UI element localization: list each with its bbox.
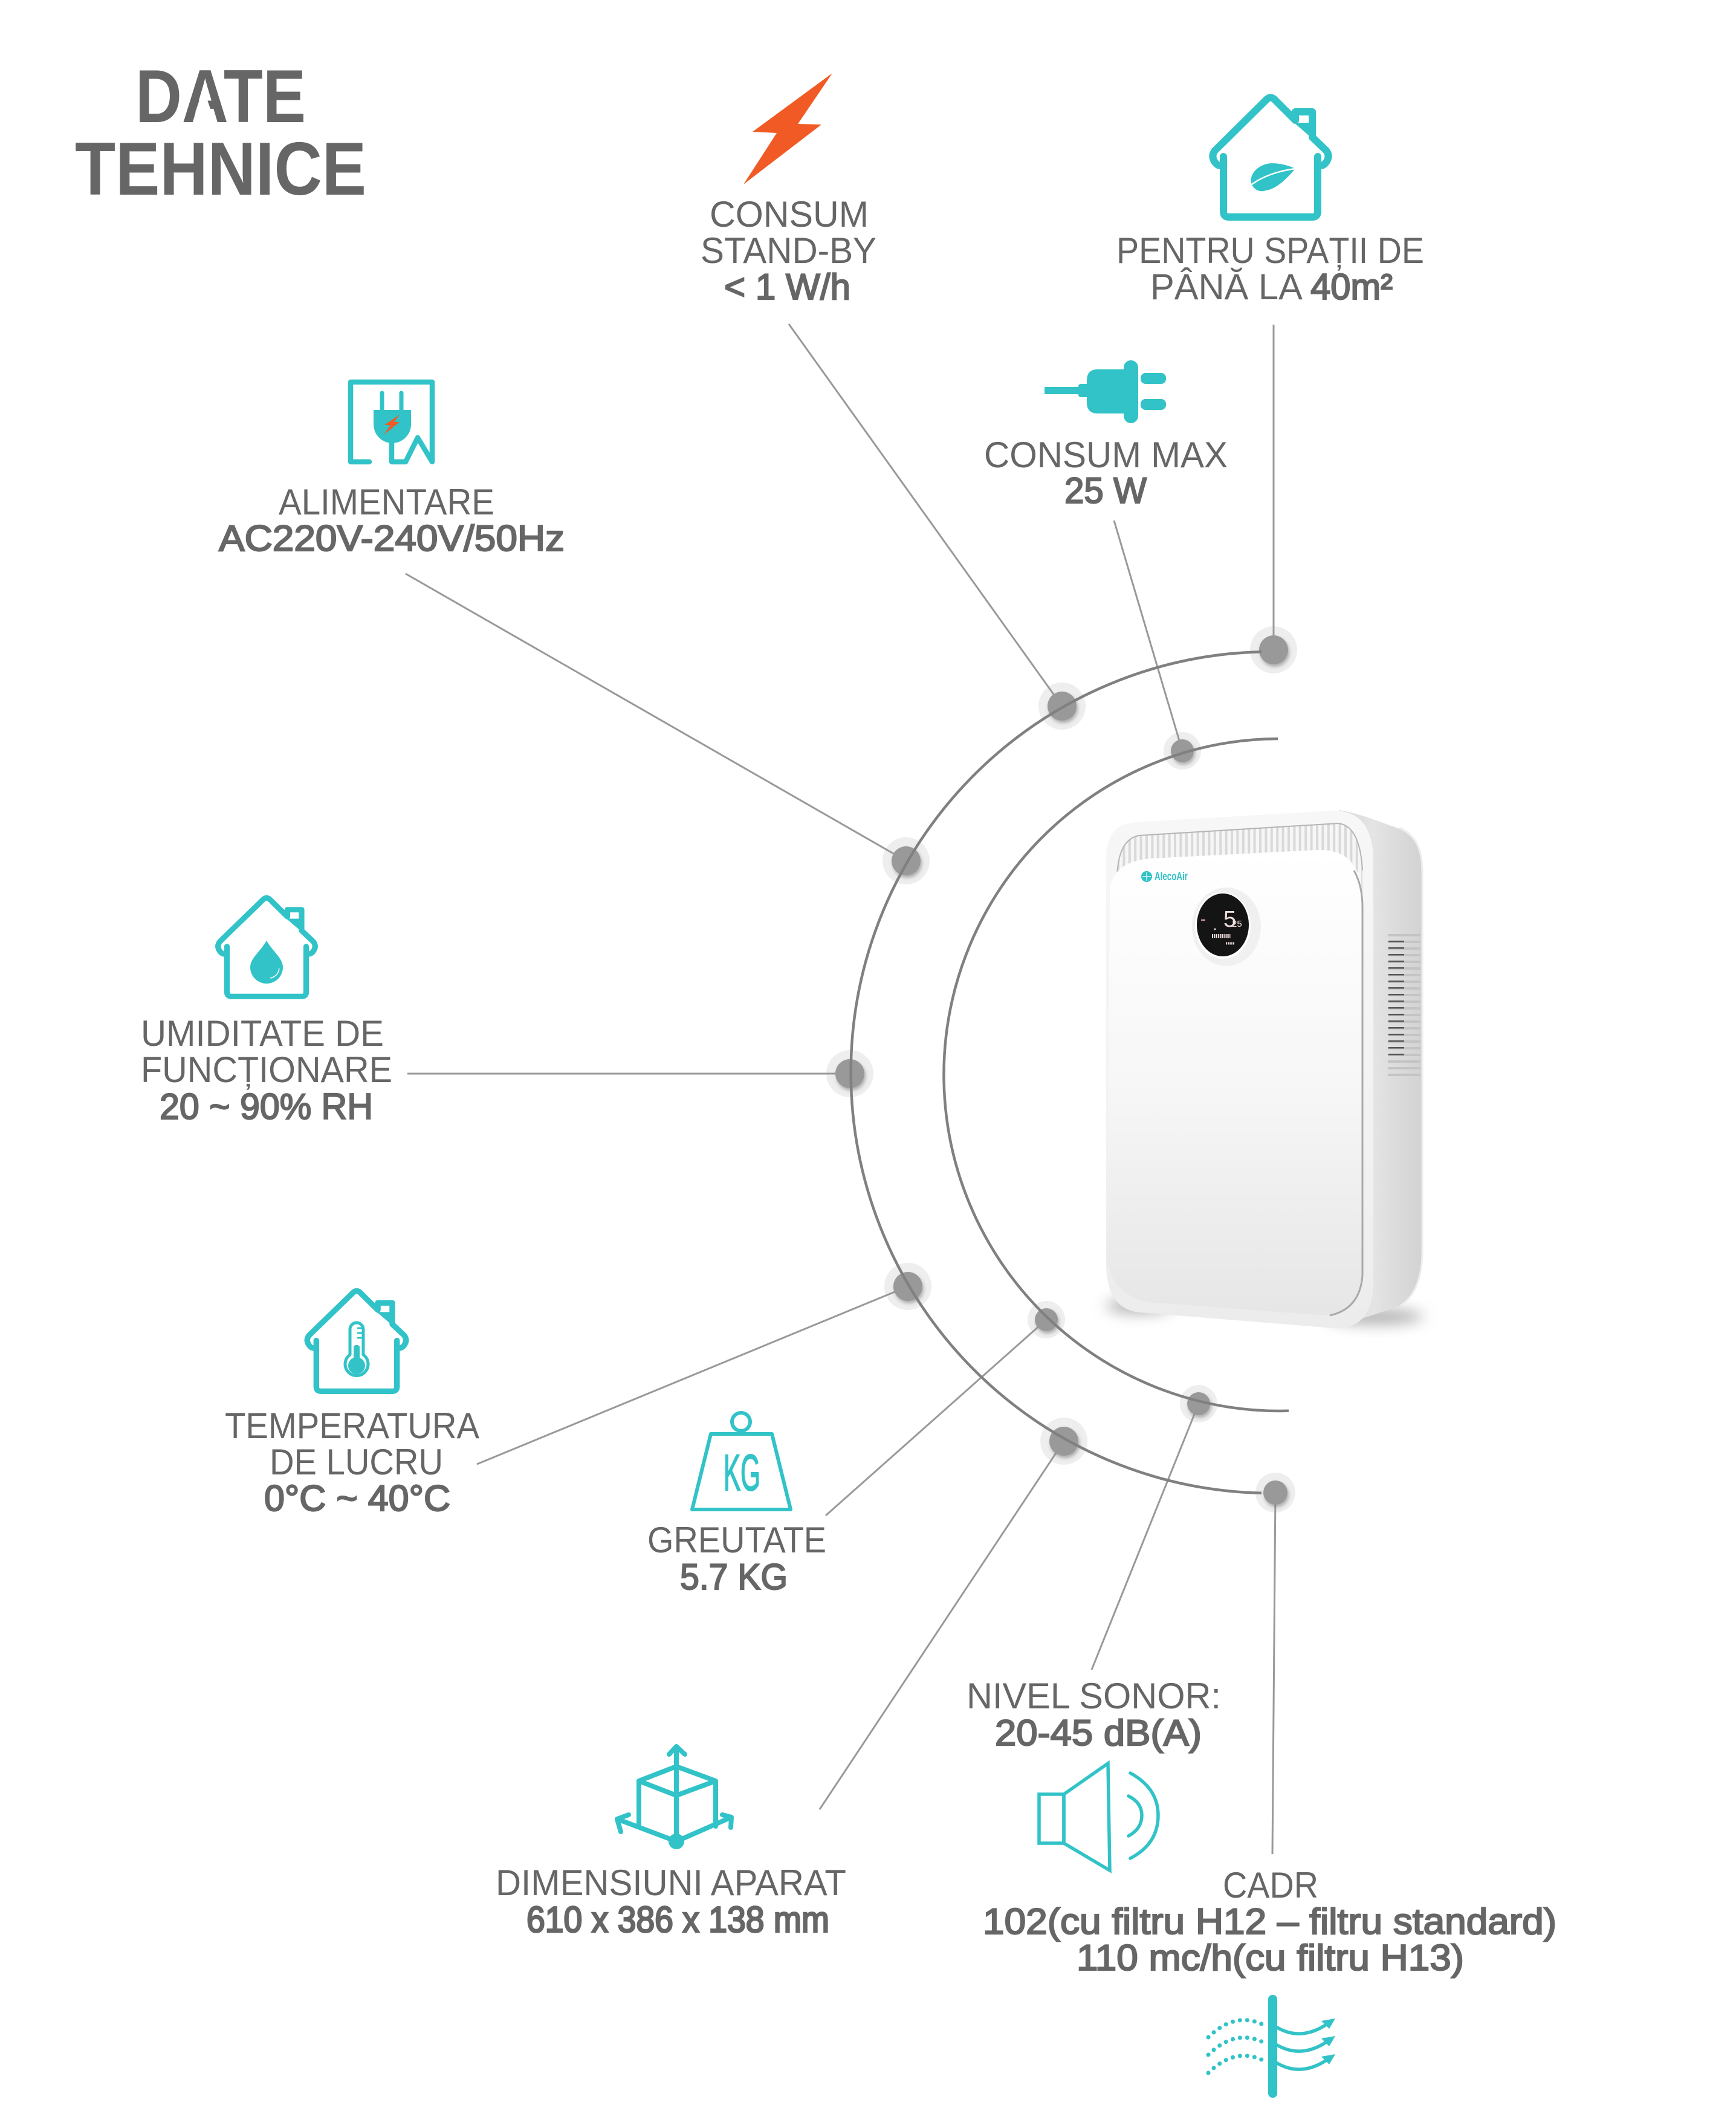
icon: lightning bolt [743, 73, 832, 184]
callout: alimentare [219, 382, 565, 559]
callout: dimensiuni: DIMENSIUNI APARAT [496, 1863, 846, 1903]
callout: dimensiuni [496, 1746, 846, 1940]
callout: temperatura: TEMPERATURA [225, 1406, 479, 1446]
product: air purifier: 25 [1232, 919, 1242, 929]
callout: consum max: 25 W [1064, 470, 1147, 511]
icon: plug in socket [351, 382, 432, 462]
icon: house with water drop [218, 898, 315, 996]
icon: house with leaf [1213, 98, 1329, 217]
title [75, 55, 366, 211]
callout: consum stand-by: CONSUM [710, 194, 869, 235]
callout: umiditate: UMIDITATE DE [141, 1013, 384, 1054]
callout: alimentare: ALIMENTARE [279, 482, 494, 522]
leader lines [406, 324, 1275, 1854]
callout: nivel sonor: 20-45 dB(A) [995, 1713, 1202, 1753]
icon: speaker [1039, 1763, 1158, 1870]
callout: temperatura [225, 1291, 479, 1519]
callout: umiditate: 20 ~ 90% RH [160, 1086, 373, 1127]
title: DATE [135, 55, 306, 138]
callout: cadr: 110 mc/h(cu filtru H13) [1077, 1938, 1464, 1978]
icon: air flow through filter [1208, 1995, 1335, 2098]
callout: consum max [984, 360, 1228, 511]
callout: consum stand-by: < 1 W/h [724, 267, 850, 307]
callout: temperatura: DE LUCRU [270, 1442, 443, 1482]
icon: plug [1045, 360, 1166, 423]
callout: dimensiuni: 610 x 386 x 138 mm [526, 1899, 829, 1940]
callout: alimentare: AC220V-240V/50Hz [219, 518, 565, 559]
callout: umiditate [141, 898, 392, 1127]
product: air purifier [1106, 810, 1423, 1328]
callout: consum max: CONSUM MAX [984, 435, 1228, 475]
icon: kg weight: KG [724, 1444, 760, 1501]
icon: house with thermometer [307, 1291, 406, 1391]
callout: consum stand-by [701, 73, 876, 307]
callout: cadr: 102(cu filtru H12 – filtru standard) [983, 1901, 1556, 1942]
product: air purifier: AlecoAir [1155, 871, 1188, 883]
callout: pentru spatii [1116, 98, 1424, 307]
product: air purifier: 5 [1223, 907, 1236, 932]
callout: cadr [983, 1865, 1556, 2098]
connector halos [826, 626, 1297, 1513]
concentric arcs [851, 652, 1289, 1493]
callout: cadr: CADR [1223, 1865, 1318, 1905]
callout: greutate: 5.7 KG [680, 1557, 788, 1597]
callout: consum stand-by: STAND-BY [701, 230, 876, 271]
callout: nivel sonor: NIVEL SONOR: [967, 1676, 1221, 1716]
callout: nivel sonor [967, 1676, 1221, 1870]
icon: kg weight [692, 1413, 791, 1509]
callout: greutate: GREUTATE [647, 1520, 826, 1560]
icon: cube with axes [617, 1746, 731, 1849]
connector dots [835, 635, 1288, 1505]
callout: pentru spatii: PÂNĂ LA 40m² [1150, 267, 1393, 307]
callout: umiditate: FUNCȚIONARE [141, 1049, 392, 1090]
callout: temperatura: 0°C ~ 40°C [264, 1478, 450, 1519]
callout: greutate [647, 1413, 826, 1597]
callout: pentru spatii: PENTRU SPAȚII DE [1116, 230, 1424, 271]
title: TEHNICE [75, 128, 366, 211]
